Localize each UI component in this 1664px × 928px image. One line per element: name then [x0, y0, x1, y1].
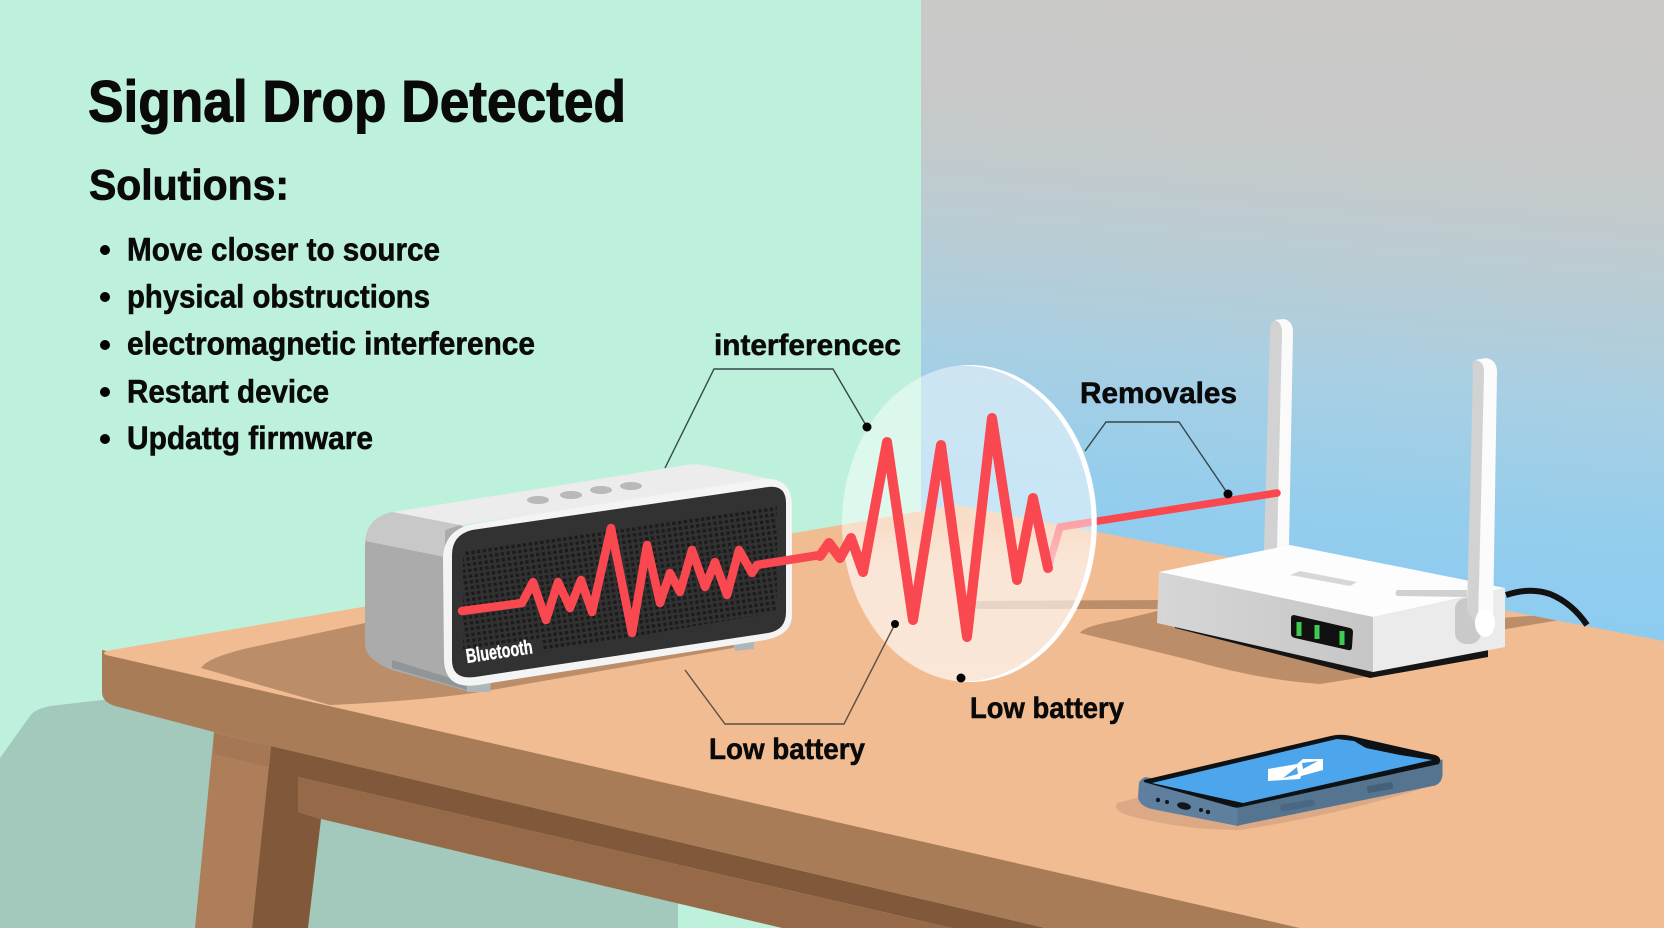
- speaker shadow: [201, 622, 740, 705]
- table top surface: [104, 505, 1664, 928]
- signal trace: turbulence in lens: [820, 418, 1048, 637]
- router shadow: [1080, 608, 1378, 684]
- signal trace: red line through speaker to router: [462, 528, 820, 633]
- table apron: [298, 777, 952, 928]
- speaker dark screen: [452, 487, 786, 677]
- background: mint left panel: [0, 0, 921, 928]
- callout: Low battery right: [956, 674, 1124, 725]
- teal floor shadow: [0, 700, 700, 928]
- router LED panel: [1291, 615, 1353, 650]
- callout: interferencec: [665, 329, 901, 468]
- router right face: [1373, 588, 1505, 672]
- speaker side highlight: [365, 512, 460, 557]
- speaker: [365, 464, 792, 692]
- solutions list: Move closer to source: [127, 232, 440, 268]
- solutions list: [100, 232, 535, 456]
- solutions list: physical obstructions: [127, 278, 430, 314]
- signal trace: faded segment and beam to router: [1048, 493, 1277, 568]
- phone side button: [1280, 799, 1315, 812]
- speaker left foot: [392, 660, 490, 690]
- lens bright rim: [958, 365, 1097, 682]
- phone body right: [1238, 760, 1442, 825]
- table leg and underside: dark: [252, 746, 1045, 928]
- solutions list: Updattg firmware: [127, 420, 373, 456]
- router LEDs: [1296, 622, 1344, 645]
- lens: [842, 365, 1097, 682]
- antenna rear: [1264, 319, 1293, 550]
- speaker top face: [393, 464, 773, 525]
- speaker grille: [463, 505, 777, 652]
- bluetooth icon: [1268, 759, 1323, 781]
- router: [1157, 319, 1587, 678]
- speaker white frame: [443, 479, 792, 686]
- table shadows: [201, 600, 1560, 705]
- speaker right foot: [733, 640, 754, 651]
- table leg: shaded top: [214, 733, 271, 767]
- callout: interferencec: interferencec: [714, 329, 901, 362]
- table: [102, 505, 1664, 928]
- phone screen: [1152, 739, 1432, 803]
- cable shadow: [974, 600, 1160, 609]
- subheading: Solutions:: [89, 162, 289, 210]
- title: Signal Drop Detected: [88, 70, 626, 134]
- callout: Low battery left: Low battery: [709, 733, 865, 766]
- router black base: [1175, 620, 1488, 678]
- speaker side body: [365, 512, 470, 692]
- phone bezel: [1145, 736, 1439, 806]
- phone body left: [1139, 778, 1238, 825]
- speaker label: Bluetooth: [465, 636, 534, 668]
- phone: [1116, 736, 1442, 830]
- antenna front: [1467, 358, 1497, 637]
- router cable shadow right: [1505, 616, 1557, 630]
- table front edge: [102, 650, 1300, 928]
- phone ports: [1156, 798, 1210, 814]
- callout: Low battery left: [685, 620, 899, 766]
- phone shadow: [1116, 775, 1437, 830]
- speaker buttons: [527, 482, 642, 504]
- callout: Removales: [1080, 377, 1237, 498]
- router front face: [1157, 572, 1373, 672]
- antenna pivot: [1455, 598, 1481, 644]
- power cable: [1506, 591, 1587, 625]
- solutions list: Restart device: [127, 374, 329, 410]
- phone volume button: [1367, 782, 1393, 793]
- table leg: front face: [195, 732, 271, 928]
- router slot: [1396, 590, 1467, 597]
- callout: Low battery right: Low battery: [970, 692, 1124, 725]
- background: grey to blue sky panel: [921, 0, 1664, 928]
- solutions list: electromagnetic interference: [127, 326, 535, 362]
- router top label: [1290, 571, 1357, 586]
- router top face: [1159, 545, 1505, 617]
- callout: Removales: Removales: [1080, 377, 1237, 410]
